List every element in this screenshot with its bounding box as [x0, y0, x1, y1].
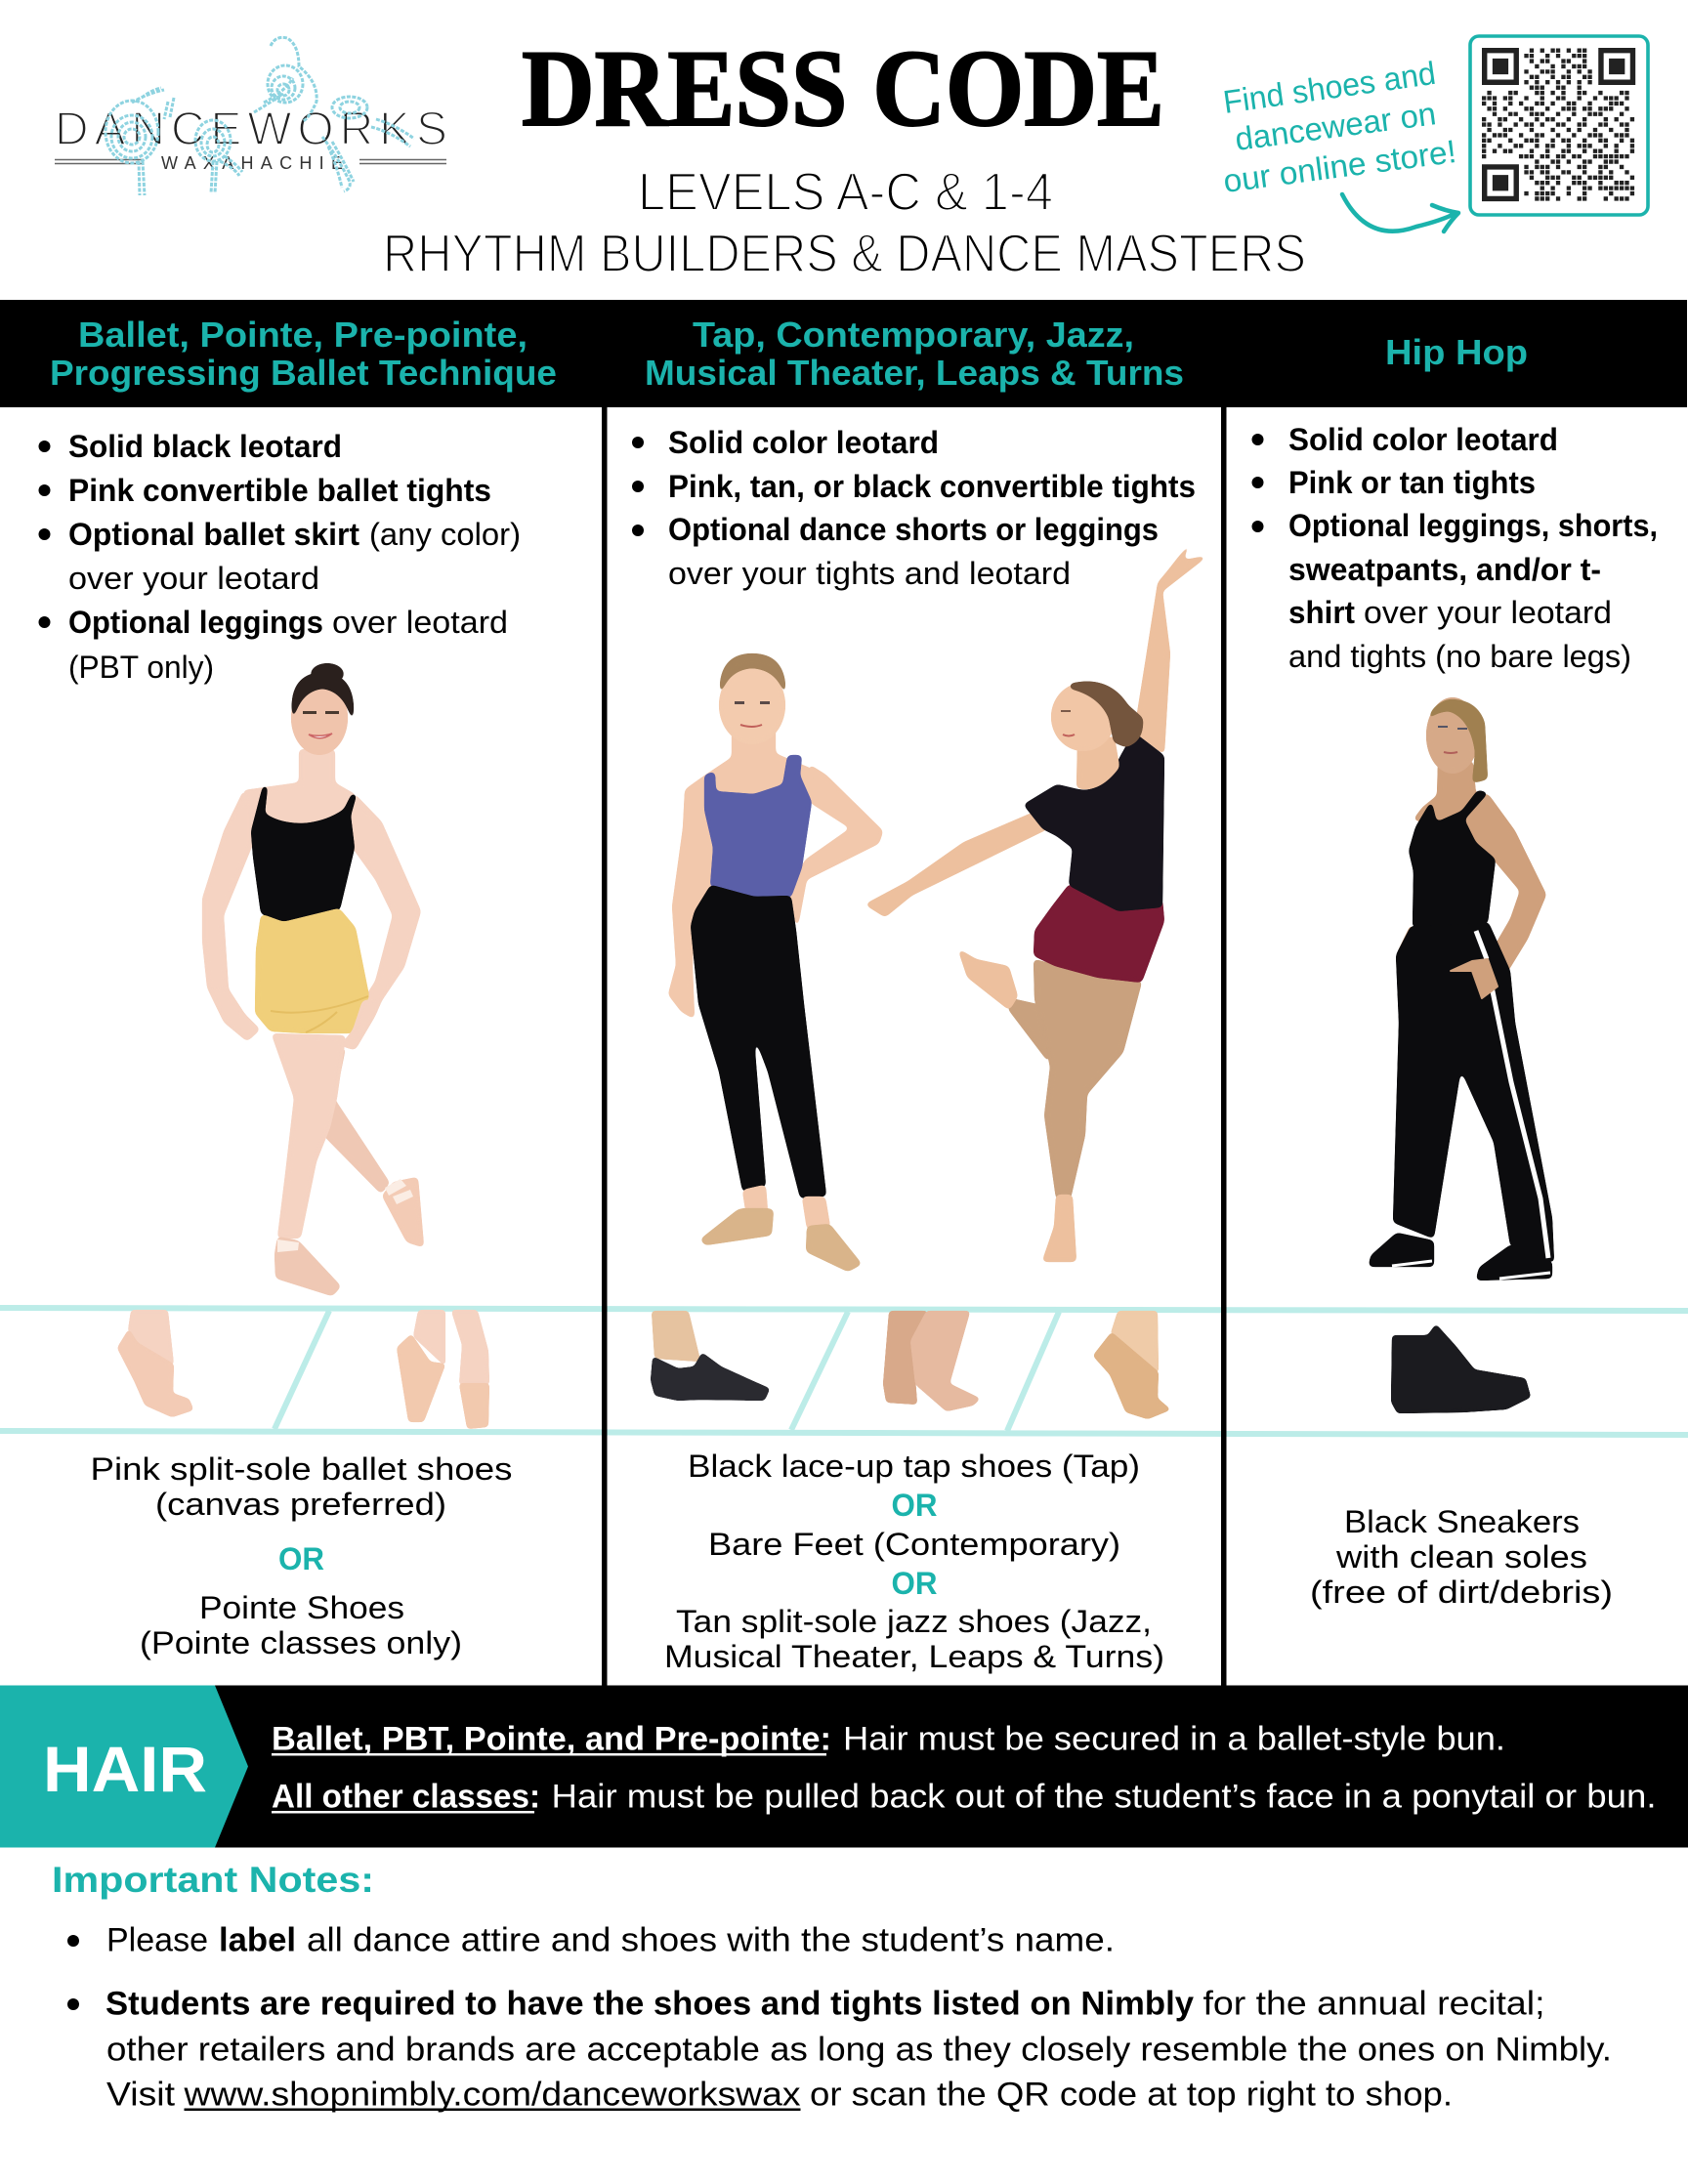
panel: ballet requirements list: over leotard [332, 605, 508, 640]
panel: hip hop requirements list: and tights (no bare legs) [1288, 639, 1631, 674]
panel: ballet requirements list: Solid black leotard [68, 429, 342, 464]
heading: ballet column: Ballet, Pointe, Pre-pointe, [78, 315, 528, 355]
arrow to QR code [1342, 194, 1458, 231]
panel: ballet requirements list: (any color) [369, 517, 521, 552]
panel: hip hop requirements list: Optional leggings, shorts, [1288, 508, 1658, 543]
text block: notes list: or scan the QR code at top right to shop. [810, 2077, 1453, 2114]
text block: sneakers: with clean soles [1335, 1539, 1587, 1575]
panel: ballet requirements list: over your leotard [68, 561, 319, 596]
text block: notes list: for the annual recital; [1203, 1985, 1545, 2022]
figure: ballet dancer with yellow skirt [203, 663, 423, 1295]
shoe band lines [0, 1308, 1688, 1435]
hair rule: other classes: All other classes: [272, 1778, 540, 1815]
logo: Danceworks Waxahachie [55, 37, 447, 195]
text block: tap, contemporary and jazz shoes: Black lace-up tap shoes (Tap) [688, 1449, 1140, 1484]
text block: notes list: Please [106, 1922, 208, 1959]
QR code [1470, 36, 1648, 215]
callout: online store: our online store! [1221, 133, 1458, 199]
panel: hair [0, 1686, 1688, 1848]
text block: ballet shoes: (canvas preferred) [155, 1487, 446, 1522]
text block: sneakers: (free of dirt/debris) [1310, 1575, 1613, 1610]
text block: tap, contemporary and jazz shoes [664, 1449, 1164, 1674]
icon: pointe shoes [398, 1311, 488, 1428]
title: DRESS CODE: DRESS CODE [522, 28, 1164, 149]
heading: hip hop column: Hip Hop [1385, 332, 1528, 372]
panel: ballet requirements list: (PBT only) [68, 650, 214, 685]
figure: woman in black shirt and burgundy shorts [866, 544, 1205, 1261]
text block: notes list: other retailers and brands are acceptable as long as they closely resemble the ones on Nimbly. [106, 2032, 1612, 2069]
panel: ballet requirements list: Optional leggings [68, 605, 323, 640]
callout: online store: dancewear on [1233, 95, 1438, 157]
logo: Danceworks Waxahachie: WAXAHACHIE [161, 153, 343, 173]
icon: bare feet [884, 1312, 979, 1410]
text block: ballet shoes: (Pointe classes only) [140, 1625, 462, 1660]
hair label tab: HAIR [43, 1733, 207, 1805]
text block: sneakers: Black Sneakers [1344, 1504, 1580, 1539]
panel: tap and contemporary requirements list: Optional dance shorts or leggings [668, 512, 1159, 547]
callout: online store: Find shoes and [1221, 55, 1438, 120]
text block: notes list [67, 1922, 1612, 2114]
text block: tap, contemporary and jazz shoes: Tan split-sole jazz shoes (Jazz, [676, 1604, 1152, 1639]
text block: ballet shoes: OR [278, 1541, 324, 1576]
text block: notes list: www.shopnimbly.com/danceworkswax [183, 2077, 801, 2114]
panel: hip hop requirements list: over your leotard [1364, 595, 1612, 630]
panel: ballet requirements list: Optional ballet skirt [68, 517, 359, 552]
text block: notes list: Students are required to have the shoes and tights listed on Nimbly [106, 1985, 1194, 2022]
panel: tap and contemporary requirements list: Pink, tan, or black convertible tights [668, 469, 1196, 504]
text block: tap, contemporary and jazz shoes: Bare Feet (Contemporary) [708, 1527, 1120, 1562]
figure: girl in blue leotard and black leggings [669, 653, 882, 1271]
text block: tap, contemporary and jazz shoes: OR [891, 1488, 938, 1523]
text block: notes list: Visit [106, 2077, 176, 2114]
panel: hip hop requirements list: shirt [1288, 595, 1355, 630]
column dividers [602, 407, 1227, 1686]
panel: hip hop requirements list [1252, 422, 1658, 674]
text block: ballet shoes [90, 1451, 512, 1660]
hair rule: other classes: Hair must be pulled back out of the student’s face in a ponytail or bun. [551, 1778, 1657, 1815]
panel: tap and contemporary requirements list: Solid color leotard [668, 425, 939, 460]
panel: black header row [0, 300, 1687, 407]
subtitle: programs: RHYTHM BUILDERS & DANCE MASTERS [383, 223, 1306, 283]
text block: ballet shoes: Pink split-sole ballet shoes [90, 1451, 512, 1487]
logo: Danceworks Waxahachie: DANCEWORKS [55, 104, 447, 155]
panel: ballet requirements list: Pink convertible ballet tights [68, 473, 491, 508]
hair rule: ballet: Ballet, PBT, Pointe, and Pre-pointe: [272, 1721, 831, 1758]
subtitle: levels: LEVELS A-C & 1-4 [638, 161, 1053, 222]
icon: black tap shoe [652, 1312, 769, 1400]
text block: sneakers [1310, 1504, 1613, 1610]
figure: girl in black tank and track pants [1370, 697, 1553, 1280]
heading: tap and contemporary column [645, 315, 1184, 393]
heading: ballet column: Progressing Ballet Technique [50, 353, 557, 393]
heading: important notes: Important Notes: [52, 1860, 374, 1900]
text block: tap, contemporary and jazz shoes: Musical Theater, Leaps & Turns) [664, 1639, 1164, 1674]
icon: ballet slipper [118, 1311, 192, 1416]
text block: notes list: all dance attire and shoes with the student’s name. [307, 1922, 1115, 1959]
hair rule: ballet: Hair must be secured in a ballet-style bun. [843, 1721, 1505, 1758]
callout: online store [1221, 55, 1458, 199]
panel: ballet requirements list [39, 429, 521, 685]
heading: tap and contemporary column: Tap, Contemporary, Jazz, [693, 315, 1134, 355]
heading: ballet column [50, 315, 557, 393]
hair label tab [0, 1686, 248, 1848]
panel: hip hop requirements list: Pink or tan tights [1288, 465, 1536, 500]
panel: tap and contemporary requirements list [632, 425, 1196, 591]
icon: black sneaker [1392, 1325, 1530, 1412]
text block: ballet shoes: Pointe Shoes [199, 1590, 404, 1625]
icon: tan jazz shoe [1094, 1312, 1169, 1418]
panel: hip hop requirements list: sweatpants, and/or t- [1288, 552, 1601, 587]
text block: notes list: label [219, 1922, 296, 1959]
hair rule: ballet [272, 1721, 1505, 1758]
text block: tap, contemporary and jazz shoes: OR [891, 1566, 938, 1601]
panel: hip hop requirements list: Solid color leotard [1288, 422, 1558, 457]
panel: tap and contemporary requirements list: over your tights and leotard [668, 556, 1071, 591]
heading: tap and contemporary column: Musical Theater, Leaps & Turns [645, 353, 1184, 393]
